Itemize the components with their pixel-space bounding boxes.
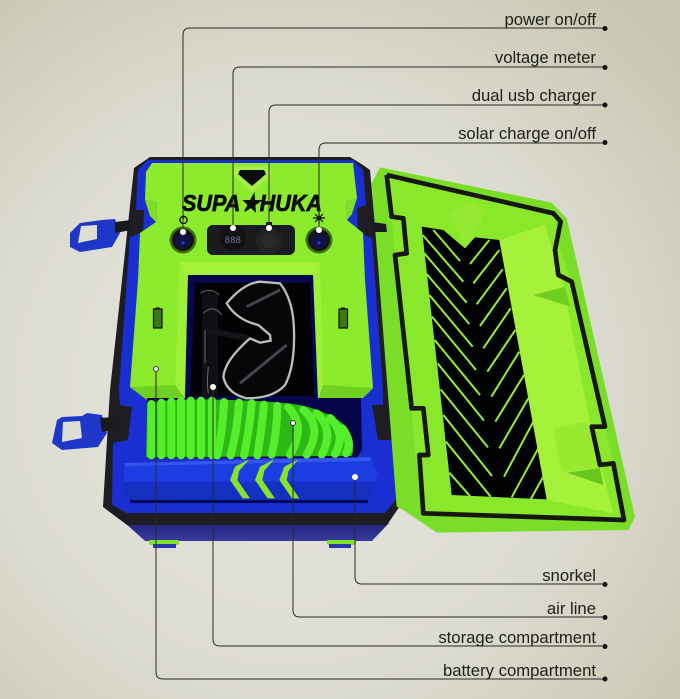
instrument panel: 888 <box>225 235 241 245</box>
lid hinge <box>372 222 387 232</box>
storage compartment <box>185 275 318 400</box>
front tray <box>123 457 378 503</box>
instrument panel <box>207 222 295 255</box>
icon: right battery <box>339 308 348 328</box>
lid raised light block <box>499 225 613 513</box>
leader: storage compartment <box>210 384 608 649</box>
blue inner frame <box>112 160 397 513</box>
labels <box>438 10 596 680</box>
label: voltage meter: voltage meter <box>495 48 596 67</box>
coil bay <box>147 398 362 458</box>
label: battery compartment: battery compartment <box>443 661 596 680</box>
diamond emblem <box>232 166 272 192</box>
open lid <box>372 167 635 533</box>
logo: SUPA★HUKA <box>182 190 322 216</box>
icon: sun <box>313 212 325 224</box>
lid black gasket <box>387 175 624 520</box>
green top panel <box>130 163 373 400</box>
panel bevels <box>130 198 373 400</box>
icon: left battery <box>154 308 162 328</box>
label: air line: air line <box>547 599 596 618</box>
leader: power on/off <box>180 26 608 234</box>
lower base <box>125 523 389 541</box>
lid block facets <box>450 202 603 485</box>
power switch <box>170 226 196 254</box>
lid chevron vent <box>422 227 547 499</box>
leader: battery compartment <box>154 366 608 682</box>
vent green slats <box>423 230 543 499</box>
leader: solar charge on/off <box>316 140 608 232</box>
lid shell <box>372 167 635 533</box>
leader: snorkel <box>352 474 608 587</box>
air line coil <box>146 399 353 457</box>
left upper clip <box>70 219 131 252</box>
black outer shell <box>103 157 402 525</box>
left lower clip <box>52 413 113 450</box>
label: dual usb charger: dual usb charger <box>472 86 596 105</box>
label: snorkel: snorkel <box>542 566 596 585</box>
label: power on/off: power on/off <box>504 10 596 29</box>
snorkel <box>201 290 250 397</box>
leader: air line <box>290 420 608 620</box>
label: storage compartment: storage compartment <box>438 628 596 647</box>
label: solar charge on/off: solar charge on/off <box>458 124 596 143</box>
case: main box <box>52 157 402 548</box>
lid interior <box>387 175 625 520</box>
icon: power symbol <box>180 215 187 224</box>
dive mask <box>223 282 294 398</box>
solar switch <box>306 226 332 254</box>
leader: dual usb charger <box>266 102 608 230</box>
tray chevrons <box>230 459 299 498</box>
leader: voltage meter <box>230 65 608 230</box>
feet <box>149 540 356 548</box>
